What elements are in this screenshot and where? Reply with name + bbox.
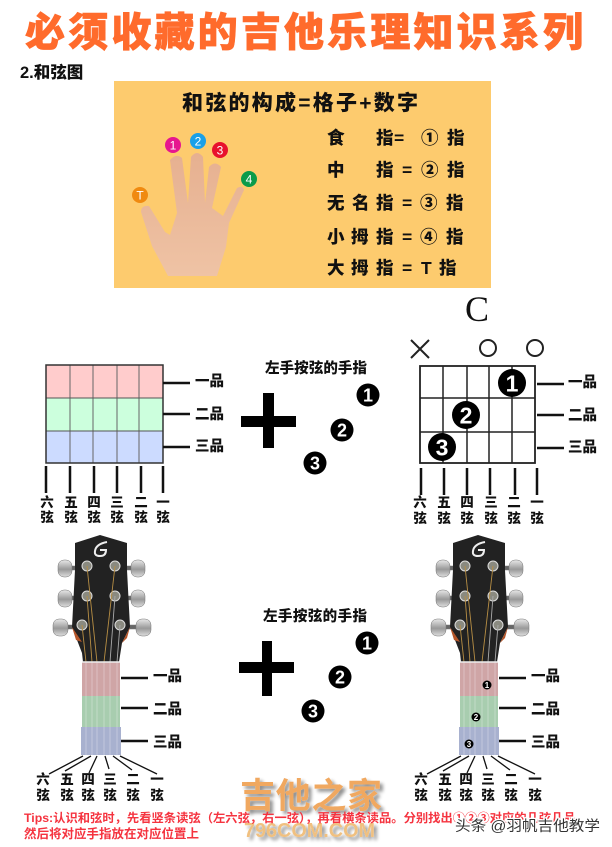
- string labels: 一: [530, 495, 544, 510]
- guitar neck: blank: [36, 535, 182, 803]
- strings: [460, 566, 493, 662]
- finger row: index: 指: [376, 128, 394, 148]
- guitar neck: C chord: [414, 535, 560, 803]
- string labels: 五: [437, 495, 451, 510]
- watermark: site name: [240, 777, 382, 842]
- finger marker 4: 4: [246, 172, 253, 186]
- finger row: little: [327, 227, 464, 247]
- finger row: thumb: T: [421, 258, 432, 278]
- string labels: 弦: [150, 787, 164, 803]
- finger dots: 2: [460, 402, 472, 428]
- string labels: 六: [40, 494, 54, 510]
- finger marker 3: 3: [217, 144, 224, 158]
- finger dots: 3: [467, 740, 472, 749]
- string labels: 弦: [481, 787, 495, 803]
- string labels: 二: [504, 772, 518, 787]
- finger row: ring: =: [402, 193, 412, 213]
- string labels: 六: [36, 771, 50, 787]
- tuner pegs: [455, 561, 503, 630]
- title: 必须收藏的吉他乐理知识系列: [25, 11, 583, 55]
- finger row: middle: =: [402, 160, 412, 180]
- string labels: 弦: [507, 510, 521, 526]
- finger row: ring: 无: [327, 193, 345, 213]
- finger key: upper: 1: [363, 386, 373, 406]
- source watermark: 头条 @羽帆吉他教学: [455, 818, 600, 835]
- fret labels: 一品: [531, 669, 560, 685]
- string labels: 五: [64, 495, 78, 510]
- string labels: 弦: [413, 510, 427, 526]
- finger row: little: =: [402, 227, 412, 247]
- finger key: upper: 3: [310, 454, 320, 474]
- finger dots: 3: [436, 434, 448, 460]
- panel: chord composition: [114, 81, 491, 288]
- string labels: [414, 756, 542, 803]
- finger row: ring: 指: [446, 193, 464, 213]
- fret labels: 一品: [568, 375, 597, 391]
- string labels: 三: [110, 495, 124, 510]
- logo: [473, 542, 485, 556]
- tuner knobs: [53, 560, 151, 636]
- finger key: upper: [265, 359, 380, 474]
- finger marker 2: 2: [195, 134, 202, 148]
- string labels: [413, 468, 544, 526]
- finger row: ring: ③: [420, 193, 438, 213]
- fret labels: 二品: [153, 702, 182, 718]
- finger row: index: ①: [421, 128, 439, 148]
- string labels: 五: [438, 772, 452, 787]
- tuner pegs: [77, 561, 125, 630]
- fret labels: [121, 669, 182, 751]
- finger dots: 1: [506, 370, 519, 396]
- finger row: thumb: 指: [439, 258, 457, 278]
- finger row: ring: 名: [352, 193, 370, 213]
- plus sign: [241, 393, 296, 448]
- string labels: 弦: [414, 787, 428, 803]
- string labels: 一: [150, 772, 164, 787]
- string labels: 四: [460, 495, 474, 510]
- muted string mark: [411, 340, 429, 358]
- string labels: 五: [60, 772, 74, 787]
- finger dots: 1: [485, 681, 490, 690]
- string labels: 弦: [110, 509, 124, 525]
- finger key: upper: 2: [337, 420, 347, 440]
- strings: [82, 566, 115, 662]
- string labels: 弦: [126, 787, 140, 803]
- finger row: middle: 中: [327, 160, 344, 180]
- fret labels: 二品: [568, 408, 597, 424]
- string labels: 弦: [134, 509, 148, 525]
- string labels: 弦: [504, 787, 518, 803]
- tips text: 然后将对应手指放在对应位置上: [24, 826, 199, 841]
- string labels: 四: [87, 495, 101, 510]
- finger row: index: 指: [447, 128, 465, 148]
- finger marker 1: [165, 137, 181, 153]
- chord name: C: [465, 289, 489, 329]
- fret labels: 三品: [195, 439, 224, 455]
- finger row: index: 食: [327, 128, 345, 148]
- finger row: index: =: [394, 128, 404, 148]
- finger marker 4: [241, 171, 257, 187]
- finger row: thumb: 指: [376, 258, 394, 278]
- headstock: [72, 535, 130, 662]
- fret labels: [163, 374, 224, 455]
- string labels: 弦: [87, 509, 101, 525]
- string labels: 弦: [437, 510, 451, 526]
- finger dots: [428, 369, 526, 461]
- string labels: 三: [484, 495, 498, 510]
- finger row: little: 指: [376, 227, 394, 247]
- finger row: middle: 指: [376, 160, 394, 180]
- finger key: lower: 1: [362, 634, 372, 654]
- panel heading: 和弦的构成=格子+数字: [182, 91, 418, 115]
- finger key: lower: 左手按弦的手指: [263, 607, 368, 625]
- finger row: little: 小: [327, 227, 345, 247]
- finger marker T: [132, 187, 148, 203]
- finger key: upper: 左手按弦的手指: [265, 359, 368, 377]
- finger row: middle: [327, 160, 465, 180]
- string labels: [40, 466, 170, 525]
- fret labels: 三品: [153, 735, 182, 751]
- string labels: 一: [528, 772, 542, 787]
- finger marker T: T: [136, 188, 144, 202]
- string labels: 弦: [64, 509, 78, 525]
- finger marker 2: [190, 133, 206, 149]
- string labels: 弦: [60, 787, 74, 803]
- fret labels: 一品: [195, 374, 224, 390]
- tuner knobs: [431, 560, 529, 636]
- finger row: little: ④: [420, 227, 438, 247]
- finger row: thumb: [327, 258, 457, 278]
- finger key: lower: [263, 607, 378, 722]
- finger row: middle: ②: [421, 160, 439, 180]
- chord grid: blank frets: [40, 365, 224, 525]
- finger row: middle: 指: [447, 160, 465, 180]
- fret labels: [537, 375, 597, 456]
- finger row: ring: 指: [376, 193, 394, 213]
- section heading: 2.和弦图: [20, 62, 83, 82]
- plus sign: [239, 641, 294, 696]
- logo: [95, 542, 107, 556]
- headstock: [450, 535, 508, 662]
- string labels: 六: [414, 771, 428, 787]
- string labels: 二: [126, 772, 140, 787]
- finger row: little: 拇: [351, 227, 368, 247]
- finger key: lower: 2: [335, 668, 345, 688]
- finger row: thumb: 大: [327, 258, 345, 278]
- finger row: index: [327, 128, 465, 148]
- finger row: thumb: 拇: [351, 258, 368, 278]
- string labels: 弦: [484, 510, 498, 526]
- icon: hand: [141, 153, 244, 276]
- string labels: 弦: [530, 510, 544, 526]
- string labels: 四: [81, 772, 95, 787]
- tips text: Tips:认识和弦时，先看竖条读弦（左六弦，右一弦），再看横条读品。分别找出①②③对应的几弦几品，: [24, 810, 588, 825]
- fret labels: 三品: [568, 440, 597, 456]
- finger marker 3: [212, 142, 228, 158]
- fret labels: 一品: [153, 669, 182, 685]
- string labels: 弦: [40, 509, 54, 525]
- string labels: 弦: [156, 509, 170, 525]
- finger row: ring: [327, 193, 464, 213]
- string labels: 弦: [36, 787, 50, 803]
- fret labels: [499, 669, 560, 751]
- finger key: lower: 3: [308, 702, 318, 722]
- string labels: 弦: [528, 787, 542, 803]
- finger dots: [464, 680, 492, 749]
- string labels: 二: [507, 495, 521, 510]
- string labels: 一: [156, 495, 170, 510]
- string labels: 二: [134, 495, 148, 510]
- fret labels: 二品: [531, 702, 560, 718]
- open string marks: [480, 340, 543, 356]
- string labels: 弦: [81, 787, 95, 803]
- fret labels: 二品: [195, 407, 224, 423]
- string labels: 三: [481, 772, 495, 787]
- string labels: 弦: [459, 787, 473, 803]
- fret labels: 三品: [531, 735, 560, 751]
- fretboard: [459, 662, 499, 755]
- string labels: 三: [103, 772, 117, 787]
- finger row: little: 指: [446, 227, 464, 247]
- string labels: 四: [459, 772, 473, 787]
- chord diagram: C: [411, 340, 597, 526]
- tips text: [24, 810, 588, 841]
- watermark: site name: 吉他之家: [240, 777, 382, 816]
- finger dots: 2: [474, 713, 479, 722]
- finger row: thumb: =: [402, 258, 412, 278]
- finger marker 1: 1: [170, 138, 177, 152]
- string labels: 六: [413, 494, 427, 510]
- fretboard: [81, 662, 121, 755]
- string labels: [36, 756, 164, 803]
- string labels: 弦: [438, 787, 452, 803]
- string labels: 弦: [460, 510, 474, 526]
- watermark: site name: 796COM.COM: [244, 820, 375, 842]
- string labels: 弦: [103, 787, 117, 803]
